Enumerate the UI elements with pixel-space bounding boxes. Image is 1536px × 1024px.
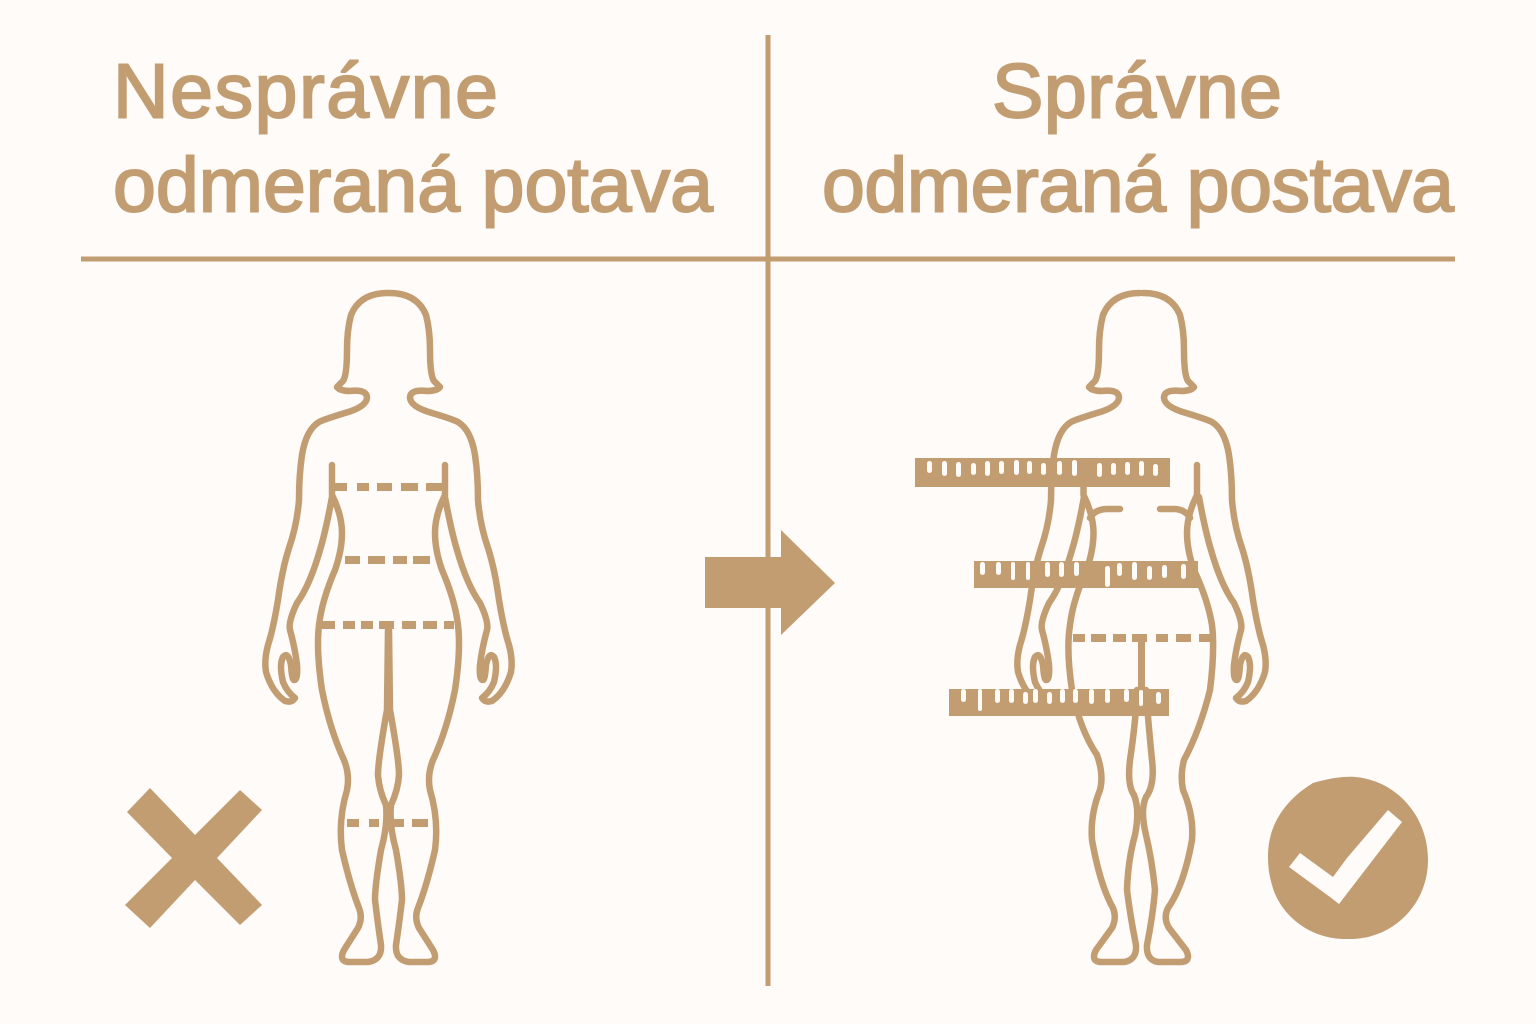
arrow	[705, 530, 835, 635]
tape measure: hip	[949, 689, 1169, 716]
heading: incorrect	[113, 48, 713, 228]
heading: incorrect: odmeraná potava	[113, 142, 713, 228]
horizontal divider	[81, 256, 1455, 262]
icon: check mark badge	[1268, 777, 1428, 939]
tape measure: waist	[974, 561, 1198, 588]
dashed measurement lines	[322, 483, 454, 827]
heading: correct: odmeraná postava	[822, 142, 1454, 228]
figure: correctly measured body	[915, 293, 1266, 962]
figure: incorrectly measured body	[265, 293, 512, 962]
underbust curls	[1090, 509, 1190, 518]
icon: cross mark	[125, 788, 262, 928]
tape measure: chest	[915, 458, 1170, 487]
dashed hip line	[1073, 634, 1210, 642]
heading: incorrect: Nesprávne	[113, 48, 498, 134]
heading: correct: Správne	[992, 48, 1282, 134]
heading: correct	[822, 48, 1454, 228]
vertical divider	[766, 35, 770, 986]
